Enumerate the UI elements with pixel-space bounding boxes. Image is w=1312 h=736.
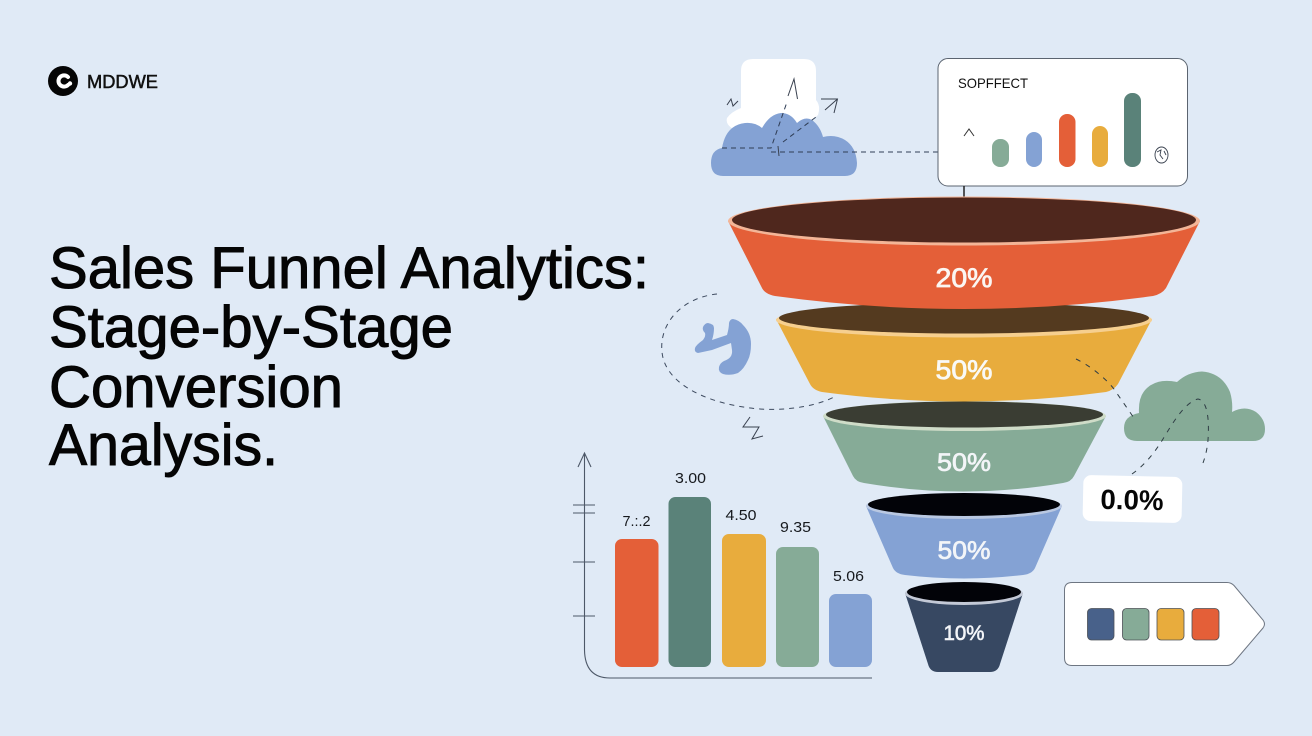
- dashed connector to green cloud: [1076, 359, 1136, 421]
- funnel stage 4: 50%: [938, 537, 990, 565]
- funnel stage 3: [823, 401, 1106, 492]
- icon: green cloud: [1124, 372, 1265, 441]
- dashed arc to callout: [1132, 399, 1208, 474]
- funnel stage 4: [866, 493, 1062, 578]
- chart value labels: [622, 470, 864, 585]
- card bars: [992, 93, 1141, 167]
- card globe icon: [1155, 147, 1168, 163]
- funnel stage 3: 50%: [937, 449, 991, 477]
- title: Conversion: [49, 355, 343, 420]
- dashed path around blue shape: [662, 294, 836, 409]
- panel: small bar chart card: [938, 58, 1188, 186]
- chart axes: [573, 453, 872, 678]
- chart bars: [615, 497, 872, 667]
- icon: blue abstract shape: [695, 319, 751, 375]
- funnel stage 2: 50%: [936, 355, 992, 385]
- legend tag: [1064, 582, 1264, 666]
- legend swatches: [1088, 608, 1219, 640]
- callout: 0.0%: 0.0%: [1100, 484, 1164, 516]
- callout: 0.0%: [1083, 475, 1182, 523]
- connector from card to funnel: [963, 186, 965, 198]
- card heading: SOPFFECT: [958, 75, 1028, 91]
- chart value labels: 3.00: [675, 470, 706, 487]
- icon: zigzag: [743, 417, 763, 439]
- chart value labels: 4.50: [726, 507, 756, 524]
- funnel stage 2: [776, 302, 1152, 402]
- funnel stage 1: 20%: [936, 263, 992, 293]
- logo: MDDWE: [87, 72, 158, 92]
- cloud illustration with arrows: [711, 59, 938, 176]
- chart value labels: 7.:.2: [622, 513, 650, 530]
- chart value labels: 5.06: [833, 568, 864, 585]
- title: Analysis.: [49, 413, 278, 478]
- chart value labels: 9.35: [780, 519, 811, 536]
- title: Stage-by-Stage: [49, 295, 453, 360]
- funnel stage 1: [728, 196, 1200, 309]
- funnel: [728, 196, 1200, 672]
- title: Sales Funnel Analytics:: [49, 236, 649, 301]
- funnel stage 5: 10%: [944, 622, 984, 645]
- bar chart: [573, 453, 872, 678]
- funnel stage 5: [905, 582, 1023, 672]
- card caret icon: [964, 129, 974, 136]
- title: [49, 236, 649, 478]
- logo: [48, 66, 158, 96]
